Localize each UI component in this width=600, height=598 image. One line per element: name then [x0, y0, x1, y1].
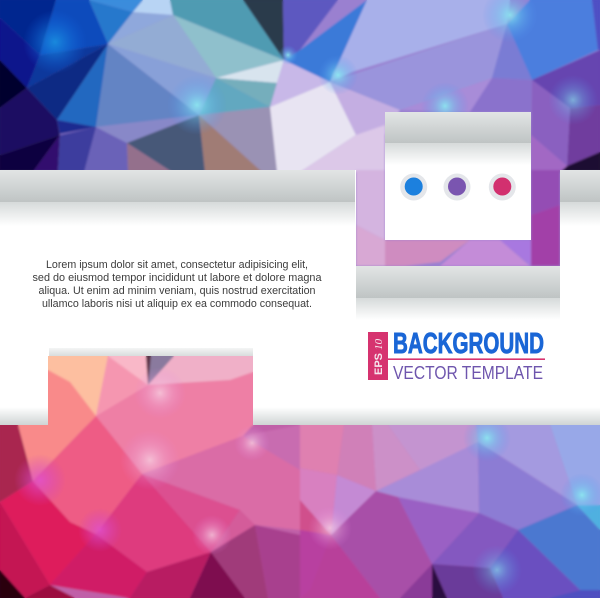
text block: lorem ipsum: aliqua. Ut enim ad minim veniam, quis nostrud exercitation — [38, 285, 316, 297]
panel: buttons card — [385, 112, 531, 240]
logo: background vector template — [368, 328, 545, 383]
icon: blue dot — [400, 174, 427, 200]
subheading: vector template: VECTOR TEMPLATE — [393, 363, 543, 383]
text block: lorem ipsum — [32, 259, 322, 310]
badge: EPS 10: EPS 10 — [373, 338, 385, 375]
polygon background: top blue and purple — [0, 0, 600, 270]
icon: pink dot — [489, 174, 516, 200]
polygon background: lower pink and violet — [0, 356, 600, 598]
text block: lorem ipsum: ullamco laboris nisi ut aliquip ex ea commodo consequat. — [42, 298, 312, 310]
icon: purple dot — [444, 174, 470, 200]
panel: white content sheet — [0, 170, 600, 425]
text block: lorem ipsum: Lorem ipsum dolor sit amet, consectetur adipisicing elit, — [46, 259, 308, 271]
text block: lorem ipsum: sed do eiusmod tempor incididunt ut labore et dolore magna — [32, 272, 322, 284]
heading: background: BACKGROUND — [393, 328, 544, 360]
badge: EPS 10 — [368, 332, 388, 380]
